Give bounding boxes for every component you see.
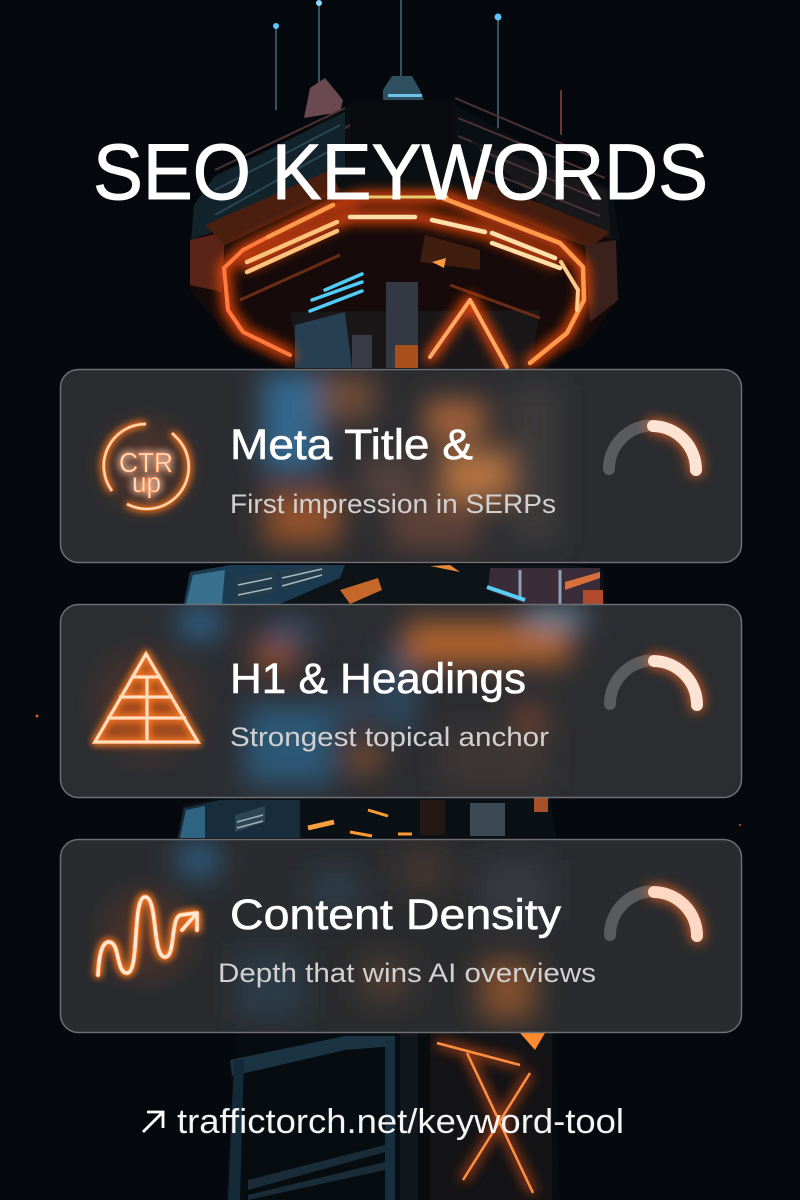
neon ring glow <box>224 197 584 367</box>
gauge: content density <box>610 892 697 936</box>
icon: CTR up: up <box>132 467 161 498</box>
panel: H1 and headings <box>60 604 742 798</box>
title: SEO KEYWORDS <box>93 127 708 216</box>
gauge: H1 <box>610 660 697 705</box>
tower hull underside <box>190 170 618 368</box>
gauge: meta title <box>609 426 696 470</box>
text: H1 description: Strongest topical anchor <box>230 722 549 752</box>
icon: wave with arrow <box>85 873 209 997</box>
icon: CTR up: CTR <box>119 447 173 478</box>
heading: content density: Content Density <box>230 891 562 939</box>
blue neon lines <box>310 274 362 311</box>
link: tool URL <box>143 1103 624 1141</box>
tower top: superstructure <box>190 76 620 255</box>
panel background: content density <box>60 839 742 1033</box>
panel background: meta title <box>60 369 742 563</box>
text: meta title description: First impression in SERPs <box>230 489 556 519</box>
text: URL: traffictorch.net/keyword-tool <box>177 1103 624 1141</box>
heading: H1 and headings: H1 & Headings <box>230 655 526 703</box>
text: content density description: Depth that wins AI overviews <box>218 958 596 988</box>
icon: arrow <box>143 1112 163 1132</box>
panel: meta title <box>60 369 742 563</box>
panel: content density <box>60 839 742 1033</box>
heading: meta title: Meta Title & <box>230 421 473 469</box>
panel background: H1 and headings <box>60 604 742 798</box>
tower base <box>225 1033 560 1200</box>
stray sparks <box>36 714 741 826</box>
tower mid section one <box>183 565 605 604</box>
icon: CTR up <box>84 404 208 528</box>
tower mid section two <box>178 798 556 838</box>
neon ring tubes <box>224 197 584 367</box>
tower top: antennas <box>273 0 561 135</box>
icon: pyramid <box>75 633 219 777</box>
